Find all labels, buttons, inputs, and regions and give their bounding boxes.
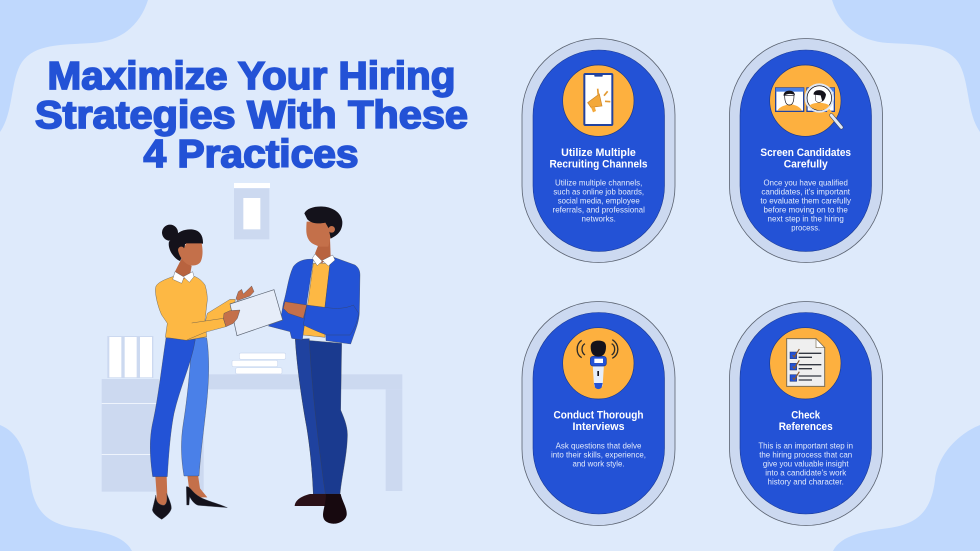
card 4 heading [779,409,833,433]
card 4 body: the hiring process that can [759,449,852,459]
hair bun [162,225,178,241]
card 2 body: candidates, it's important [761,186,851,196]
hair [169,229,203,261]
hair [304,207,342,239]
card 2 body: next step in the hiring [768,214,844,224]
card 1 body [553,177,645,224]
collar [312,254,335,266]
man [268,207,360,524]
card 2 body: to evaluate them carefully [760,196,852,206]
ear [328,226,335,233]
card 4 body: history and character. [768,476,844,486]
binders [107,336,153,378]
shirt [303,263,330,337]
woman [150,225,240,519]
stack of books [232,353,286,374]
card 1 inner pill [533,50,664,252]
title: Strategies With These [35,94,468,137]
shoes [295,494,327,506]
background blob: bottom right [833,425,980,551]
card 4 inner pill [740,312,872,514]
card 1 heading [550,147,648,170]
card 1 body: referrals, and professional [553,205,645,215]
paper document [230,290,283,336]
right jacket panel [325,257,360,344]
card 1 body: networks. [582,214,616,224]
card 2 outer pill [730,38,882,262]
card 4 body: into a candidate's work [765,467,847,477]
card 1 heading: Utilize Multiple [561,147,636,159]
collar [173,272,194,283]
card 3 body: into their skills, experience, [551,449,646,459]
background blob: top left [0,0,148,132]
card 4 body: This is an important step in [758,440,853,450]
card 4 body [758,440,853,486]
card 4 outer pill [730,302,882,526]
title [35,55,468,176]
neck [175,258,192,279]
card 3 body: and work style. [572,458,624,468]
card 1 outer pill [522,38,675,262]
hand [283,302,307,318]
icon: checklist document [770,328,841,399]
near arm outline [187,318,226,340]
filing cabinet [102,379,159,492]
woman's far arm and hand [205,286,254,323]
card 3 body [551,440,646,468]
shoes [186,487,227,508]
illustration: office scene [102,183,402,524]
sweater [155,276,207,340]
card 2 heading: Screen Candidates [760,147,851,159]
card 3 heading [554,409,644,433]
card 2 body: process. [791,223,820,233]
face [178,243,203,266]
card 2 heading: Carefully [784,158,829,170]
neck [315,238,331,263]
near arm [170,317,226,337]
background blob: top right [832,0,980,132]
card 1 heading: Recruiting Channels [550,158,648,170]
icon: phone with megaphone [563,65,634,136]
legs skin [187,475,207,497]
card 3 inner pill [533,312,664,514]
near hand [223,310,240,327]
card 2 body: before moving on to the [764,205,848,215]
card 2: screen candidates carefully [730,38,882,262]
icon: candidate profiles and magnifier [770,65,841,136]
card 2 body: Once you have qualified [764,177,848,187]
trousers [295,339,347,494]
front leg [150,338,195,477]
card 4 heading: Check [791,409,821,421]
card 2 inner pill [740,50,872,252]
card 3 outer pill [522,302,675,526]
left jacket panel [268,259,313,340]
icon: microphone [563,328,634,399]
card 3 body: Ask questions that delve [556,440,642,450]
title: Maximize Your Hiring [48,55,456,98]
wall frame [234,183,270,239]
card 3: conduct thorough interviews [522,302,675,526]
card 3 heading: Conduct Thorough [554,409,644,421]
card 1 body: social media, employee [558,196,640,206]
background blob: bottom left [0,425,132,551]
card 1 body: Utilize multiple channels, [555,177,642,187]
card 1: utilize multiple recruiting channels [522,38,675,262]
card 4: check references [730,302,882,526]
card 2 heading [760,147,851,170]
card 4 body: give you valuable insight [763,458,849,468]
card 3 heading: Interviews [572,421,624,433]
card 1 body: such as online job boards, [553,187,644,197]
crossed arm [303,305,359,335]
card 4 heading: References [779,421,833,433]
face [306,222,331,247]
desk [198,374,402,491]
title: 4 Practices [144,133,358,176]
back leg [181,338,209,476]
card 2 body [760,177,852,233]
